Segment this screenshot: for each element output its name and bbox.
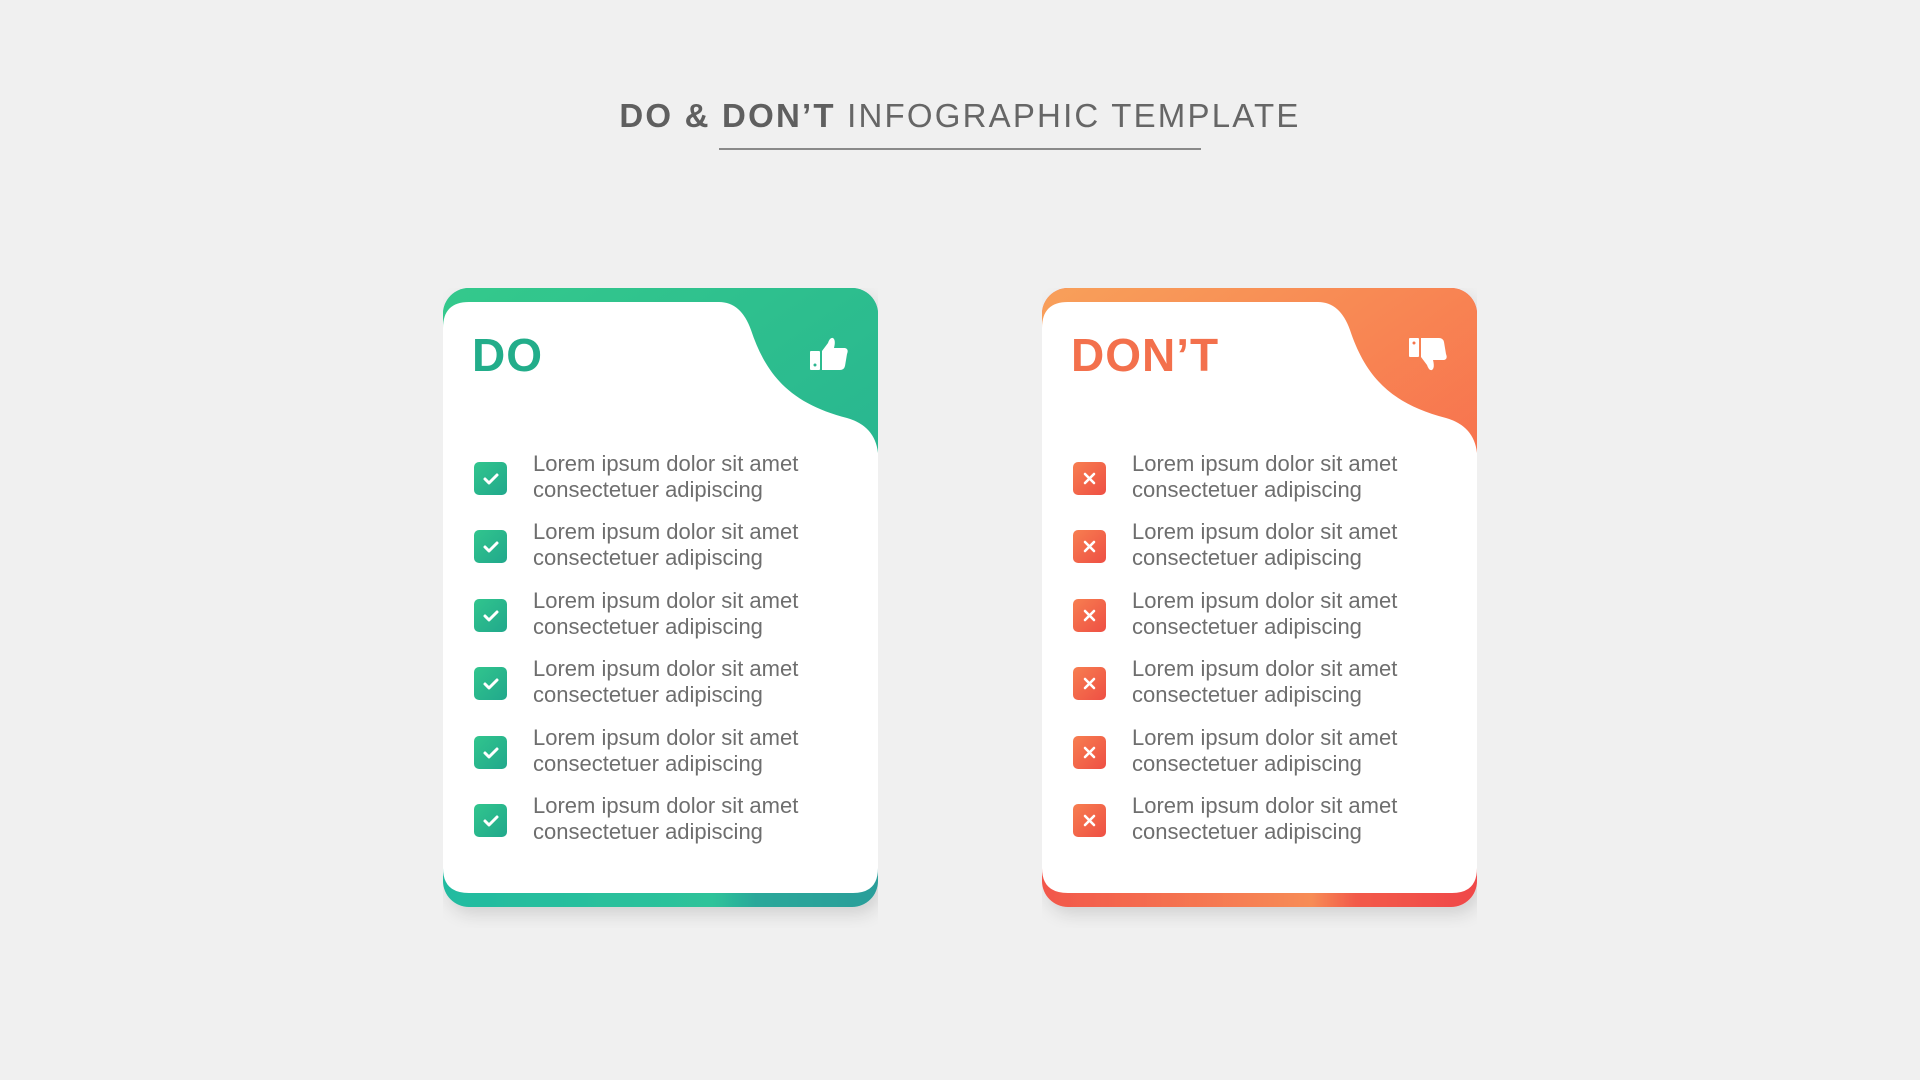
panel: do: consectetuer adipiscing xyxy=(533,477,763,502)
panel: don't xyxy=(1042,288,1477,919)
panel: do: consectetuer adipiscing xyxy=(533,751,763,776)
panel: do: Lorem ipsum dolor sit amet xyxy=(533,793,798,818)
panel: do: Lorem ipsum dolor sit amet xyxy=(533,588,798,613)
heading: DO: DO xyxy=(472,329,543,381)
panel: don't: consectetuer adipiscing xyxy=(1132,751,1362,776)
panel: don't: consectetuer adipiscing xyxy=(1132,477,1362,502)
panel: do: Lorem ipsum dolor sit amet xyxy=(533,451,798,476)
panel: do: consectetuer adipiscing xyxy=(533,682,763,707)
panel: do: consectetuer adipiscing xyxy=(533,614,763,639)
panel: don't: consectetuer adipiscing xyxy=(1132,682,1362,707)
panel: don't: Lorem ipsum dolor sit amet xyxy=(1132,793,1397,818)
panel: don't: consectetuer adipiscing xyxy=(1132,545,1362,570)
panel: do: Lorem ipsum dolor sit amet xyxy=(533,725,798,750)
panel: do: consectetuer adipiscing xyxy=(533,545,763,570)
panel: don't: Lorem ipsum dolor sit amet xyxy=(1132,725,1397,750)
panel: don't: consectetuer adipiscing xyxy=(1132,614,1362,639)
panel: don't: Lorem ipsum dolor sit amet xyxy=(1132,656,1397,681)
panel: don't: consectetuer adipiscing xyxy=(1132,819,1362,844)
panel: do: Lorem ipsum dolor sit amet xyxy=(533,519,798,544)
panel: don't: Lorem ipsum dolor sit amet xyxy=(1132,451,1397,476)
icon: thumbs down xyxy=(1409,338,1447,370)
panel: don't: Lorem ipsum dolor sit amet xyxy=(1132,588,1397,613)
title: DO & DON’T INFOGRAPHIC TEMPLATE xyxy=(619,97,1301,134)
panel: do: consectetuer adipiscing xyxy=(533,819,763,844)
icon: thumbs up xyxy=(810,338,848,370)
panel: don't: Lorem ipsum dolor sit amet xyxy=(1132,519,1397,544)
heading: DON'T: DON’T xyxy=(1071,329,1219,381)
panel: do xyxy=(443,288,878,919)
panel: do: Lorem ipsum dolor sit amet xyxy=(533,656,798,681)
